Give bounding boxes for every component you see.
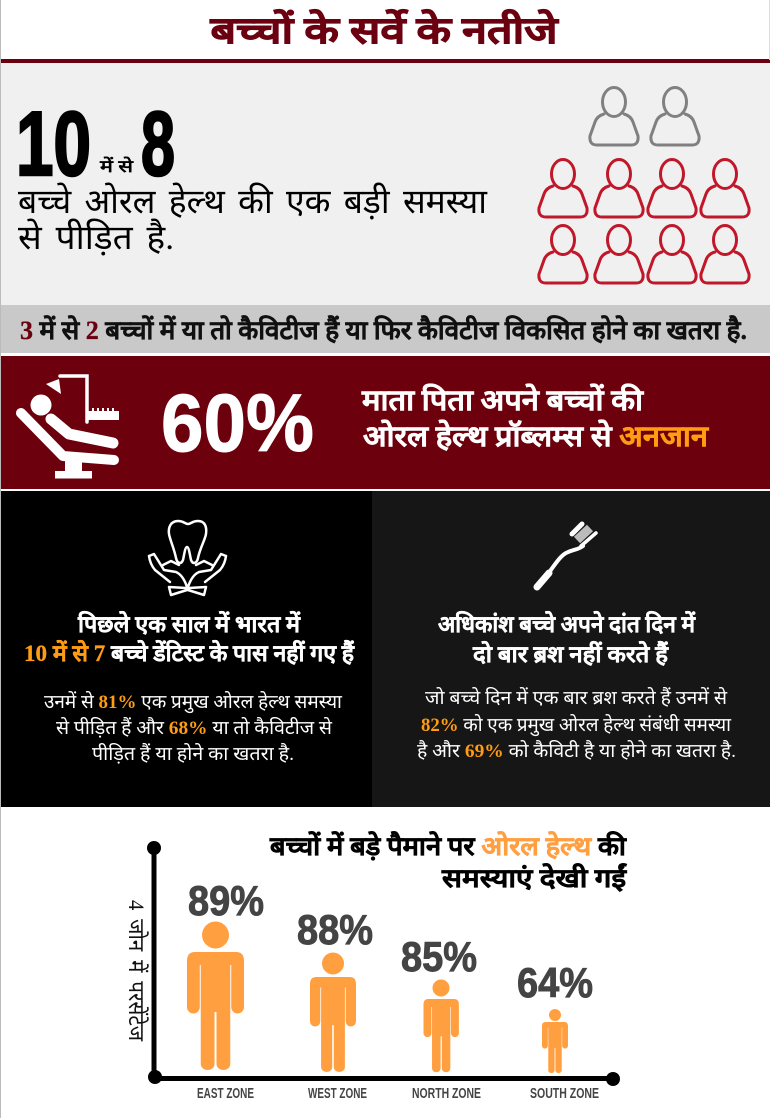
small text in-between: में से: [99, 156, 135, 176]
south zone figure: [542, 1009, 568, 1073]
chart heading: [269, 831, 627, 893]
y axis label: 4 जोन में परसेंटेज: [124, 900, 149, 1042]
percent values: 88%: [297, 906, 373, 953]
heading: दो बार ब्रश नहीं करते हैं: [472, 640, 669, 667]
icon: grey people: [590, 88, 699, 145]
west zone figure: [310, 952, 356, 1072]
panel: 3 me se 2 band: [0, 305, 770, 353]
zone labels: NORTH ZONE: [412, 1086, 481, 1102]
heading: अधिकांश बच्चे अपने दांत दिन में: [438, 610, 696, 637]
heading: 10 में से 7 बच्चे डेंटिस्ट के पास नहीं गए हैं: [24, 639, 355, 666]
title: बच्चों के सर्वे के नतीजे: [209, 9, 559, 52]
big number 8: 8: [141, 94, 175, 195]
panel: brushing: [372, 491, 770, 807]
chart heading: बच्चों में बड़े पैमाने पर ओरल हेल्थ की: [269, 831, 627, 861]
body text: पीड़ित हैं या होने का खतरा है.: [92, 742, 294, 765]
zone labels: [197, 1086, 599, 1102]
percent values: 85%: [401, 933, 477, 980]
east zone figure: [187, 922, 244, 1070]
body text: [417, 686, 736, 762]
percent values: 89%: [188, 877, 264, 924]
heading: पिछले एक साल में भारत में: [77, 610, 301, 637]
panel: dentist visits: [0, 491, 372, 807]
percent values: 64%: [517, 959, 593, 1006]
north zone figure: [424, 980, 459, 1072]
statement text: [18, 182, 488, 257]
parents text: माता पिता अपने बच्चों की: [361, 383, 645, 417]
heading: [438, 610, 696, 667]
zone labels: EAST ZONE: [197, 1086, 254, 1102]
statement text: से पीड़ित है.: [18, 218, 174, 257]
body text: है और 69% को कैविटी है या होने का खतरा है.: [417, 739, 736, 762]
big number 10: 10: [16, 94, 91, 195]
percent values: [188, 877, 593, 1006]
panel: 10 me se 8: [0, 59, 770, 305]
panel: 3 me se 2 band: 3 में से 2 बच्चों में या तो कैविटीज हैं या फिर कैविटीज विकसित होने का खतरा है.: [20, 315, 747, 345]
body text: [44, 690, 343, 765]
icon: tooth in hands: [149, 521, 226, 595]
panel: zone chart: [124, 831, 627, 1102]
zone labels: WEST ZONE: [308, 1086, 367, 1102]
body text: से पीड़ित हैं और 68% या तो कैविटीज से: [56, 716, 333, 739]
body text: उनमें से 81% एक प्रमुख ओरल हेल्थ समस्या: [44, 690, 343, 714]
parents text: [361, 383, 709, 453]
heading: [24, 610, 355, 666]
icon: red people: [539, 160, 749, 283]
icon: toothbrush: [537, 524, 596, 587]
icon: dental chair: [21, 376, 119, 478]
panel: 60 percent: [0, 356, 770, 489]
zone labels: SOUTH ZONE: [530, 1086, 599, 1102]
big percentage: 60%: [161, 378, 314, 469]
parents text: ओरल हेल्थ प्रॉब्लम्स से अनजान: [363, 419, 709, 453]
body text: जो बच्चे दिन में एक बार ब्रश करते हैं उनमें से: [425, 686, 728, 709]
chart axes: [147, 841, 620, 1086]
statement text: बच्चे ओरल हेल्थ की एक बड़ी समस्या: [18, 182, 488, 221]
body text: 82% को एक प्रमुख ओरल हेल्थ संबंधी समस्या: [421, 713, 732, 737]
chart heading: समस्याएं देखी गईं: [441, 863, 627, 893]
